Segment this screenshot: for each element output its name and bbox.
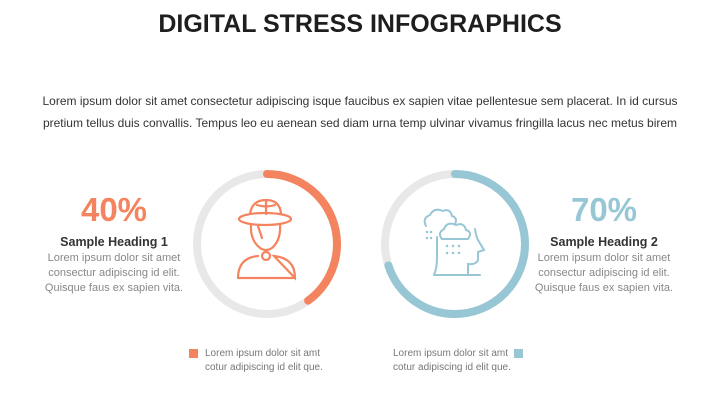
legend text left: cotur adipiscing id elit que. xyxy=(205,362,323,373)
title: DIGITAL STRESS INFOGRAPHICS xyxy=(158,10,562,38)
intro paragraph: Lorem ipsum dolor sit amet consectetur adipiscing isque faucibus ex sapien vitae pellentesue sem placerat. In id cursus pretium tellus duis convallis. Tempus leo eu aenean sed diam urna temp ulvinar vivamus fringilla lacus nec metus birem xyxy=(42,94,678,130)
percent 40: 40% xyxy=(81,191,147,228)
legend text left xyxy=(205,348,323,373)
legend right xyxy=(393,348,523,373)
legend left xyxy=(189,348,323,373)
heading 1: Sample Heading 1 xyxy=(60,235,168,249)
donut 1 (40%) xyxy=(197,174,337,314)
heading 2: Sample Heading 2 xyxy=(550,235,658,249)
body text 2: Lorem ipsum dolor sit amet consectur adipiscing id elit. Quisque faus ex sapien vita. xyxy=(535,252,673,294)
legend text right: cotur adipiscing id elit que. xyxy=(393,362,511,373)
legend swatch orange xyxy=(189,349,198,358)
icon: dizzy person xyxy=(238,200,295,278)
body text 1: Lorem ipsum dolor sit amet consectur adipiscing id elit. Quisque faus ex sapien vita. xyxy=(45,252,183,294)
legend text right: Lorem ipsum dolor sit amt xyxy=(393,348,508,359)
icon: head with rain clouds xyxy=(425,210,484,275)
legend text left: Lorem ipsum dolor sit amt xyxy=(205,348,320,359)
donut 2 (70%) xyxy=(385,174,525,314)
legend text right xyxy=(393,348,511,373)
right stat block xyxy=(535,191,673,294)
left stat block xyxy=(45,191,183,294)
legend swatch blue xyxy=(514,349,523,358)
percent 70: 70% xyxy=(571,191,637,228)
